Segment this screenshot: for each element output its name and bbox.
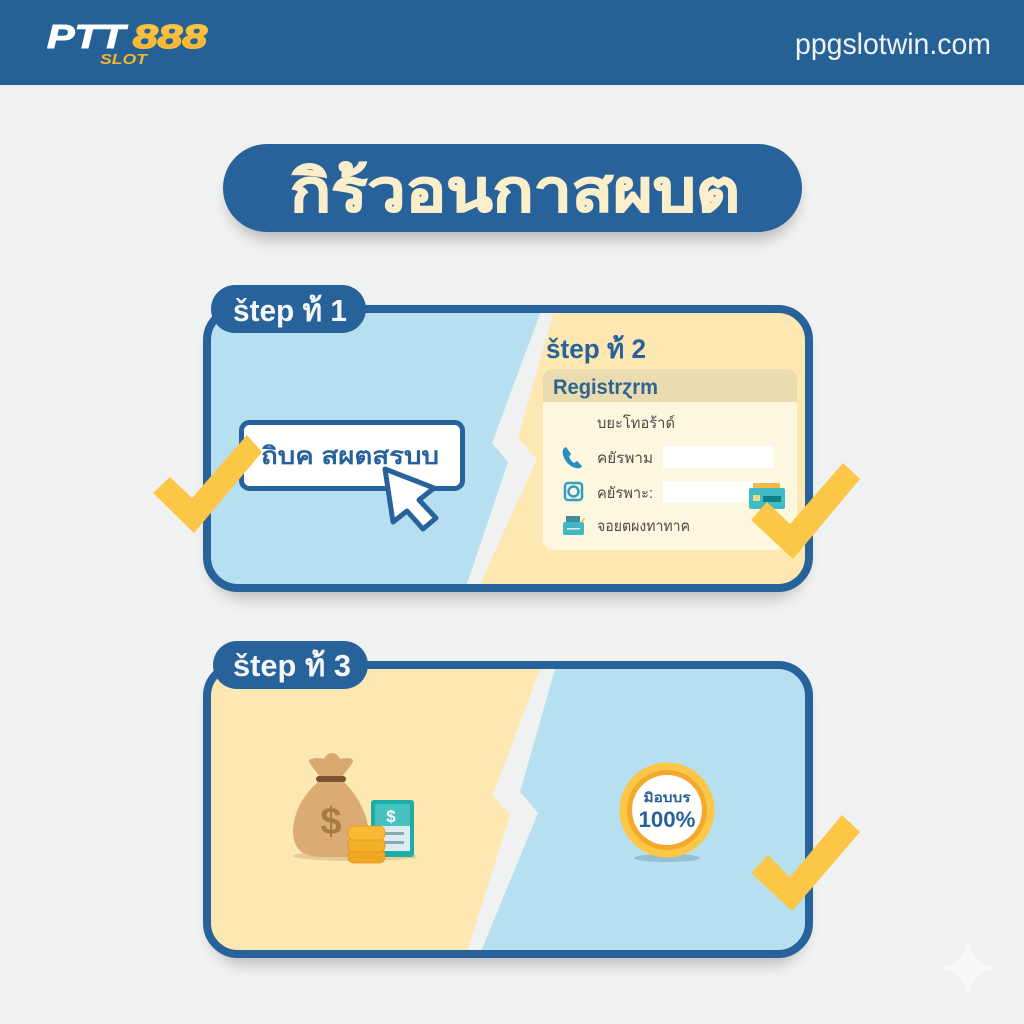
button: register	[242, 422, 462, 488]
tab: step 3: šteр ท้ 3	[233, 648, 351, 683]
tab: step 1: šteр ท้ 1	[233, 293, 347, 328]
icon: bank card	[749, 483, 785, 509]
form label: confirm: จอยตผงทาทาค	[597, 518, 690, 535]
badge: 100%: 100%	[638, 807, 696, 832]
icon: money bag, coins and receipt	[293, 753, 417, 863]
icon: mouse cursor	[385, 469, 436, 529]
icon: money bag, coins and receipt: $	[386, 807, 396, 826]
input: phone	[663, 446, 774, 468]
form label: phone: คยัรพาม	[597, 450, 653, 467]
check mark: step 1	[153, 435, 262, 533]
logo: SLOT	[100, 51, 149, 68]
badge: 100%: มิอบบร	[644, 790, 691, 805]
step 2 heading: šteр ท้ 2	[546, 334, 646, 364]
tab: step 3	[213, 641, 368, 689]
title pill: กิร้วอนกาสผบต	[290, 159, 740, 224]
check mark: step 3	[751, 815, 860, 911]
input: password	[663, 481, 774, 503]
check mark: step 2	[751, 463, 860, 559]
logo: PTT	[47, 18, 129, 55]
sparkle	[944, 944, 992, 992]
button: register: ถิบค สผตสรบบ	[261, 443, 439, 470]
form title: Registrɀrm	[553, 376, 658, 399]
icon: printer	[563, 516, 585, 535]
panel: step 3	[200, 641, 820, 965]
icon: phone	[563, 447, 582, 468]
header bar	[0, 0, 1024, 85]
badge: 100%	[620, 762, 714, 862]
icon: camera	[565, 483, 582, 500]
panel: steps 1 and 2	[200, 285, 820, 600]
form label: password: คยัรพาะ:	[597, 485, 653, 502]
logo	[47, 18, 208, 68]
tab: step 1	[211, 285, 366, 333]
form subtitle: บยะโทอร้าด์	[597, 414, 675, 432]
website url: ppgslotwin.com	[795, 28, 991, 61]
registration form card	[543, 369, 797, 550]
logo: 888	[133, 18, 208, 55]
icon: money bag, coins and receipt: $	[320, 801, 342, 843]
title pill	[223, 144, 802, 240]
